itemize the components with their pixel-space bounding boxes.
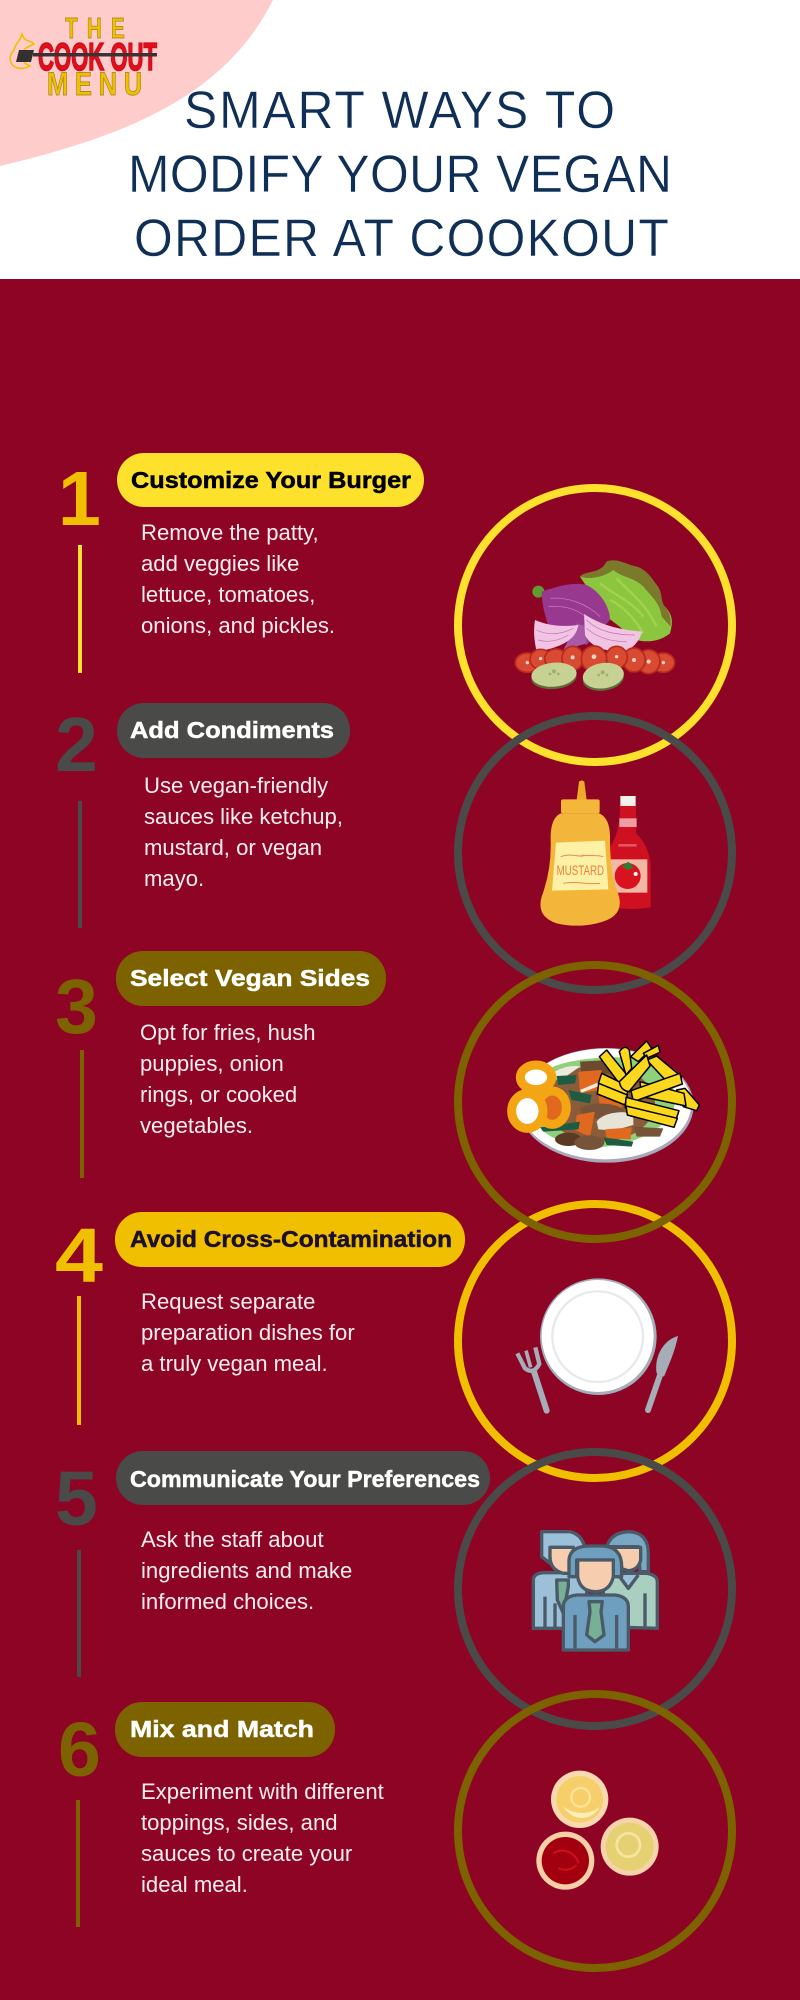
step number: 2 <box>55 702 98 788</box>
ring 2 <box>458 716 732 990</box>
logo word: THE: THE <box>65 13 125 45</box>
body text: puppies, onion <box>140 1051 284 1076</box>
body text: sauces like ketchup, <box>144 804 343 829</box>
body text: sauces to create your <box>141 1841 352 1866</box>
body text: a truly vegan meal. <box>141 1351 328 1376</box>
ring 6 <box>458 1694 732 1968</box>
body text: mayo. <box>144 866 204 891</box>
icon: spatula <box>16 50 157 62</box>
body text: Remove the patty, <box>141 520 319 545</box>
panel: step 3 select vegan sides <box>55 951 732 1239</box>
panel: step 1 customize your burger <box>58 453 732 762</box>
panel: step 5 communicate your preferences <box>55 1451 732 1726</box>
body text <box>141 520 335 638</box>
pill heading <box>116 1451 490 1505</box>
title: MODIFY YOUR VEGAN <box>128 144 672 203</box>
connector line <box>78 545 82 673</box>
pill heading: Customize Your Burger <box>131 467 411 493</box>
connector line <box>77 1296 81 1425</box>
title <box>128 80 672 267</box>
title: SMART WAYS TO <box>184 80 615 139</box>
step number: 3 <box>55 964 98 1050</box>
body text: mustard, or vegan <box>144 835 322 860</box>
body text: onions, and pickles. <box>141 613 335 638</box>
body text: preparation dishes for <box>141 1320 355 1345</box>
icon: plate with fork and knife <box>517 1278 678 1411</box>
pill heading: Add Condiments <box>130 717 334 743</box>
body text: add veggies like <box>141 551 299 576</box>
connector line <box>76 1800 80 1927</box>
title: ORDER AT COOKOUT <box>134 208 669 267</box>
body text: ideal meal. <box>141 1872 248 1897</box>
icon: flames <box>10 34 34 68</box>
connector line <box>78 801 82 928</box>
pill heading <box>117 453 424 507</box>
body text: Use vegan-friendly <box>144 773 328 798</box>
icon: sauce cups <box>536 1771 659 1890</box>
pink corner shape <box>0 0 273 166</box>
body text: lettuce, tomatoes, <box>141 582 315 607</box>
body text: Opt for fries, hush <box>140 1020 316 1045</box>
icon: mustard and ketchup bottles <box>540 780 651 926</box>
step number: 6 <box>58 1707 101 1793</box>
body text: rings, or cooked <box>140 1082 297 1107</box>
body text: informed choices. <box>141 1589 314 1614</box>
body text: Ask the staff about <box>141 1527 324 1552</box>
panel: step 6 mix and match <box>58 1694 732 1968</box>
panel: step 2 add condiments <box>55 702 732 990</box>
ring 3 <box>458 965 732 1239</box>
logo word: MENU: MENU <box>47 67 142 103</box>
logo <box>10 13 157 103</box>
pill heading <box>117 703 350 758</box>
body text <box>141 1527 352 1614</box>
step number: 1 <box>58 456 101 542</box>
ring 5 <box>458 1452 732 1726</box>
logo word: COOK OUT: COOK OUT <box>38 36 157 79</box>
pill heading: Mix and Match <box>130 1716 314 1742</box>
step number: 4 <box>55 1213 103 1299</box>
icon: mustard and ketchup bottles: MUSTARD <box>557 862 604 878</box>
icon: group of people <box>533 1532 657 1650</box>
panel: step 4 avoid cross-contamination <box>55 1204 732 1478</box>
body text: ingredients and make <box>141 1558 352 1583</box>
connector line <box>80 1050 84 1178</box>
body text <box>144 773 343 891</box>
pill heading <box>115 1212 465 1267</box>
icon: vegetables <box>515 560 675 693</box>
pill heading <box>115 1702 335 1757</box>
body text <box>141 1289 355 1376</box>
body text: Experiment with different <box>141 1779 384 1804</box>
body text <box>141 1779 384 1897</box>
body text: toppings, sides, and <box>141 1810 338 1835</box>
icon: plate of sides with fries and onion rings <box>512 1041 699 1163</box>
body text: Request separate <box>141 1289 315 1314</box>
pill heading: Communicate Your Preferences <box>130 1466 480 1492</box>
ring 1 <box>458 488 732 762</box>
step number: 5 <box>55 1456 98 1542</box>
pill heading: Avoid Cross-Contamination <box>130 1226 452 1252</box>
pill heading: Select Vegan Sides <box>130 965 370 991</box>
connector line <box>77 1550 81 1677</box>
ring 4 <box>458 1204 732 1478</box>
body text <box>140 1020 316 1138</box>
body text: vegetables. <box>140 1113 253 1138</box>
pill heading <box>116 951 386 1006</box>
